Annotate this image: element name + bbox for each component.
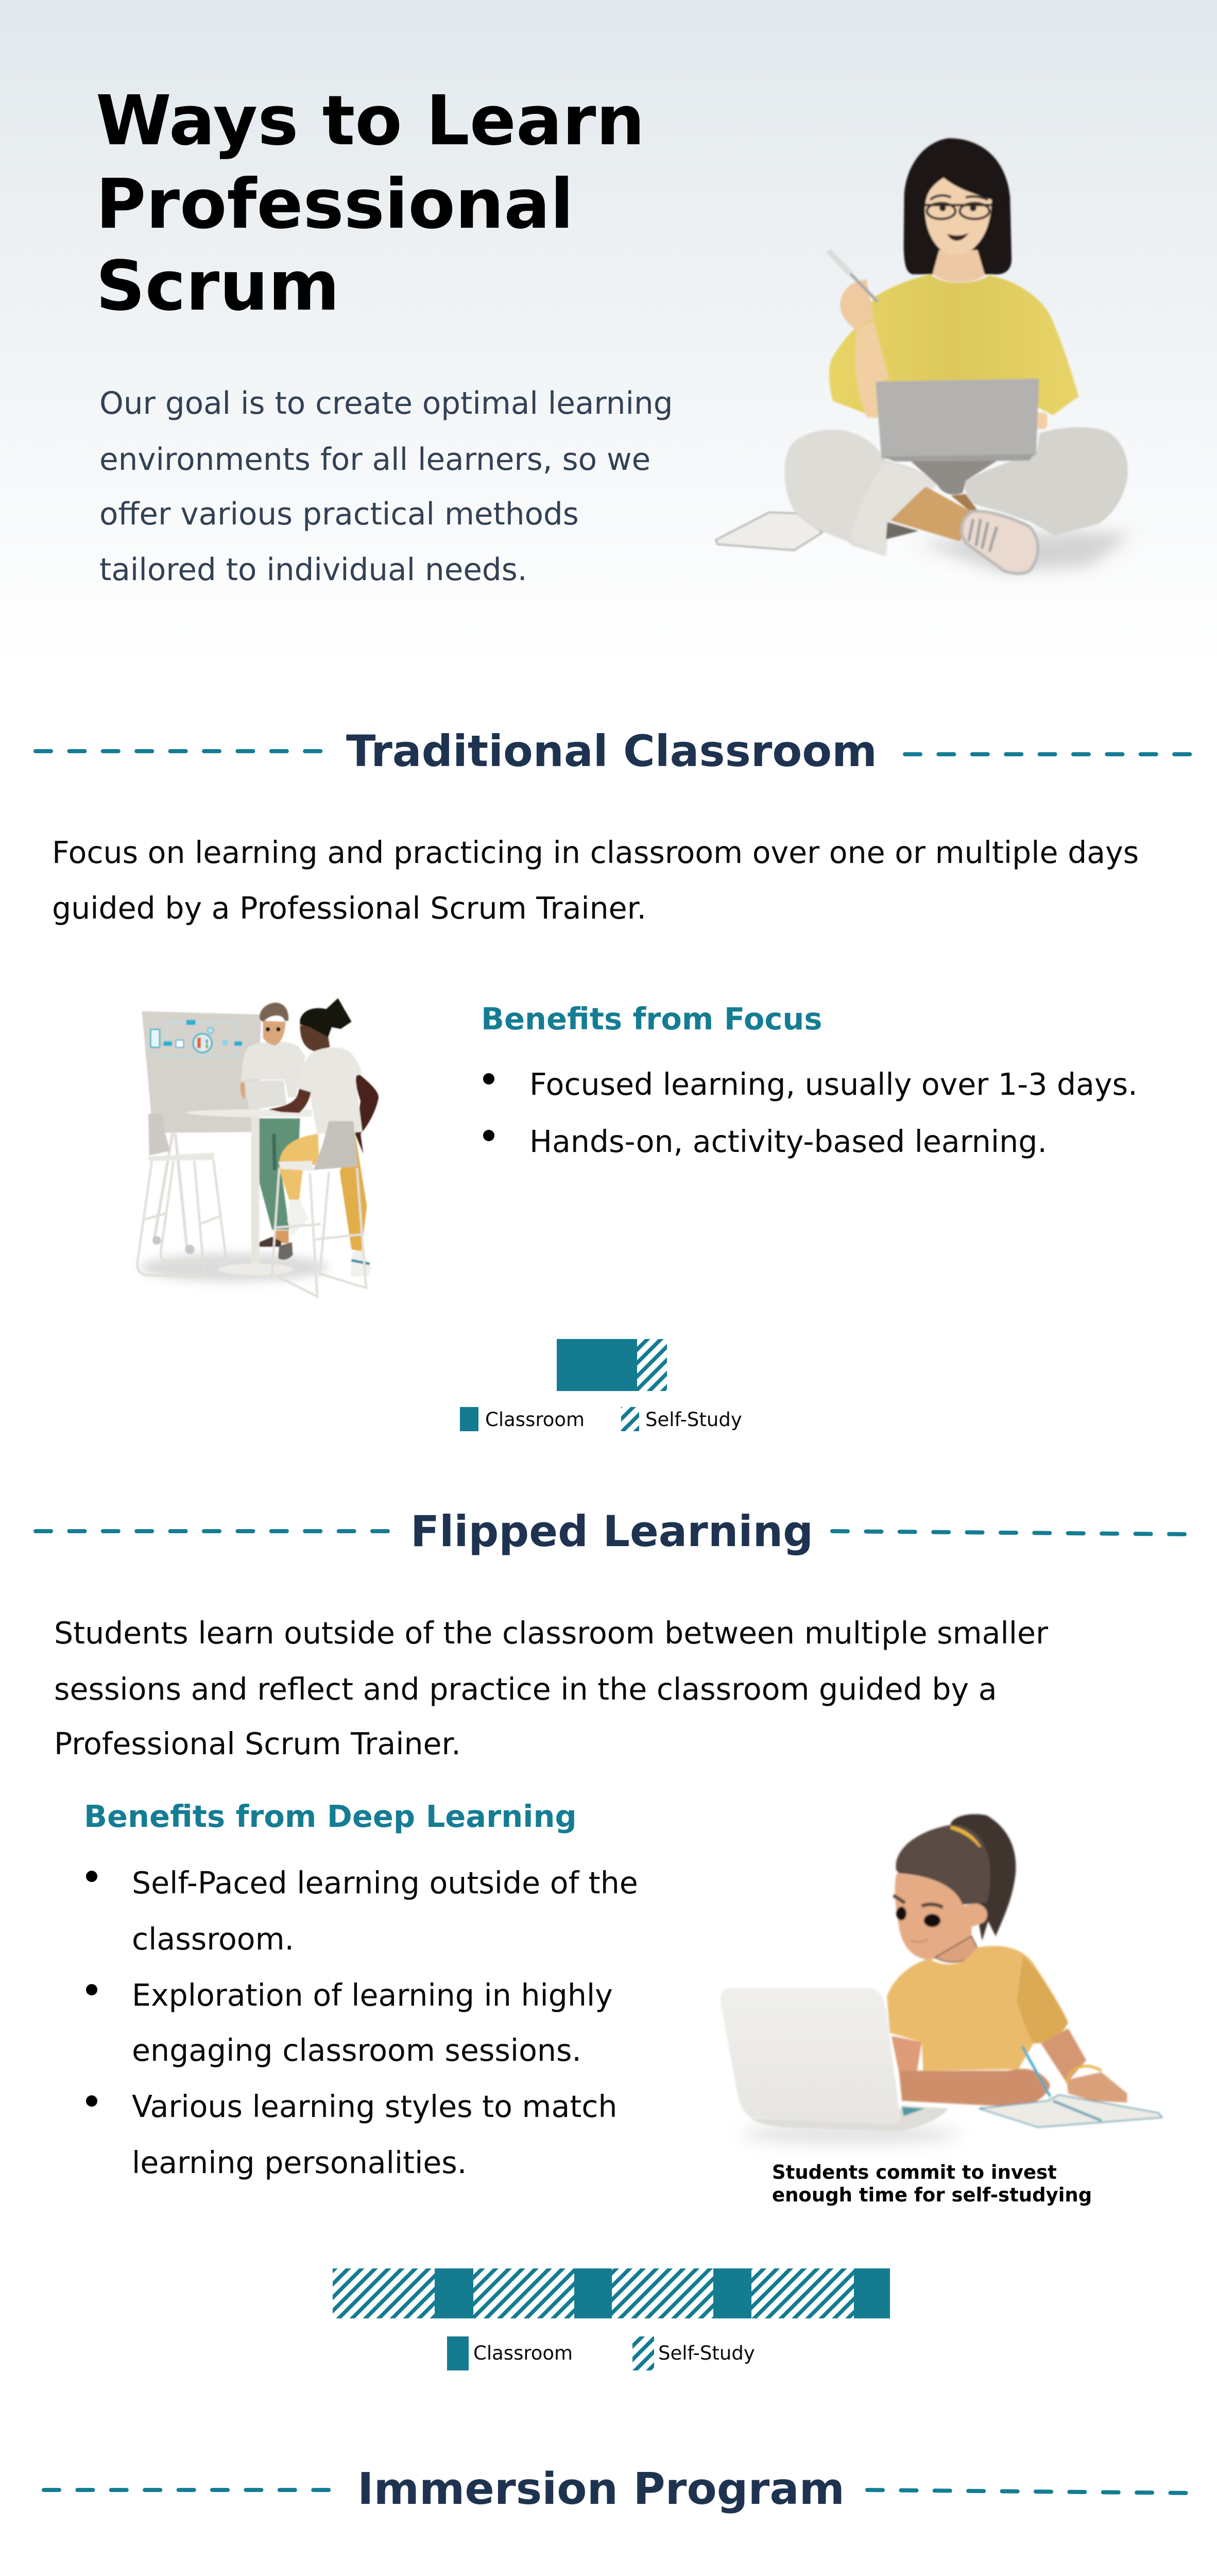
benefits text [481, 1001, 1138, 1159]
legend [460, 1407, 742, 1431]
benefits text: engaging classroom sessions. [132, 2033, 581, 2068]
benefits text: Various learning styles to match [132, 2089, 618, 2124]
section: Traditional Classroom [36, 726, 1194, 1431]
benefits text: Self-Paced learning outside of the [132, 1866, 638, 1901]
benefits text: Benefits from Deep Learning [84, 1799, 577, 1834]
heading: Immersion Program: Immersion Program [357, 2464, 845, 2515]
section: Flipped Learning [36, 1506, 1190, 2370]
benefits text [84, 1799, 638, 2180]
title [96, 81, 645, 326]
legend: Classroom [473, 2342, 573, 2364]
description [54, 1616, 1049, 1761]
illustration: two people at table [138, 998, 379, 1296]
benefits text: learning personalities. [132, 2145, 467, 2180]
schedule bar [557, 1339, 667, 1391]
intro paragraph: tailored to individual needs. [99, 552, 527, 588]
heading: Immersion Program [44, 2464, 1190, 2515]
description: sessions and reflect and practice in the classroom guided by a [54, 1672, 997, 1707]
intro paragraph [99, 386, 673, 588]
benefits text: Benefits from Focus [481, 1001, 822, 1037]
intro paragraph: Our goal is to create optimal learning [99, 386, 673, 421]
heading: Flipped Learning: Flipped Learning [410, 1506, 813, 1556]
description: Students learn outside of the classroom between multiple smaller [54, 1616, 1049, 1651]
illustration: girl on laptop [721, 1814, 1162, 2143]
illustration: woman sitting with laptop [716, 138, 1132, 573]
description: Professional Scrum Trainer. [54, 1726, 461, 1761]
benefits text: classroom. [132, 1922, 294, 1957]
heading: Flipped Learning [36, 1506, 1190, 1556]
legend [447, 2336, 755, 2370]
legend: Classroom [485, 1409, 585, 1431]
benefits text: Hands-on, activity-based learning. [529, 1124, 1047, 1159]
intro paragraph: environments for all learners, so we [99, 442, 650, 478]
section: Immersion Program [44, 2464, 1190, 2576]
title: Professional [96, 165, 574, 244]
caption: enough time for self-studying [772, 2184, 1092, 2206]
description: guided by a Professional Scrum Trainer. [52, 891, 646, 926]
benefits text: Exploration of learning in highly [132, 1978, 613, 2013]
title: Scrum [96, 247, 340, 326]
title: Ways to Learn [96, 81, 645, 161]
benefits text: Focused learning, usually over 1-3 days. [529, 1067, 1138, 1102]
intro paragraph: offer various practical methods [99, 497, 579, 532]
schedule bar [333, 2268, 890, 2318]
legend: Self-Study [658, 2342, 755, 2364]
caption [772, 2161, 1092, 2206]
heading: Traditional Classroom: Traditional Classroom [346, 726, 877, 776]
description: Focus on learning and practicing in classroom over one or multiple days [52, 835, 1139, 870]
caption: Students commit to invest [772, 2161, 1057, 2183]
legend: Self-Study [645, 1409, 742, 1431]
description [52, 835, 1139, 926]
